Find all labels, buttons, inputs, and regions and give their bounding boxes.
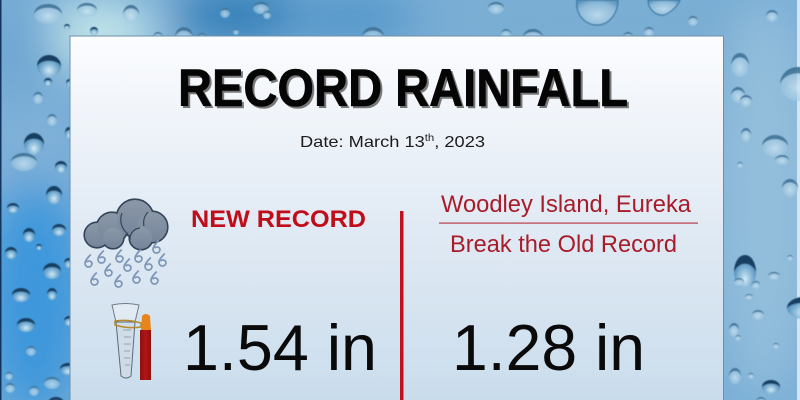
raindrops [85, 240, 166, 287]
gauge cap and bracket [141, 314, 151, 330]
date line: Date: March 13 [300, 134, 409, 151]
gauge tube [116, 322, 135, 378]
background water droplets, left side [5, 3, 139, 400]
gauge post [140, 330, 151, 380]
icon: rain gauge [112, 304, 151, 380]
gauge cup [112, 304, 139, 322]
label: location: Woodley Island, Eureka [441, 191, 692, 218]
label: old record: Break the Old Record [450, 231, 677, 258]
background water droplets, right side [729, 53, 800, 400]
label: new record: NEW RECORD [191, 206, 366, 233]
icon: rain cloud [85, 200, 167, 287]
date line: th [425, 133, 434, 144]
background water droplets, top edge [153, 0, 778, 47]
value: old record rainfall: 1.28 in [452, 311, 645, 384]
cloud [85, 200, 167, 249]
value: new record rainfall: 1.54 in [183, 311, 377, 384]
panel: main card [70, 36, 724, 400]
date line: , 2023 [434, 134, 485, 151]
title: RECORD RAINFALL [178, 59, 628, 118]
divider [400, 211, 404, 400]
rule under location [439, 222, 698, 224]
